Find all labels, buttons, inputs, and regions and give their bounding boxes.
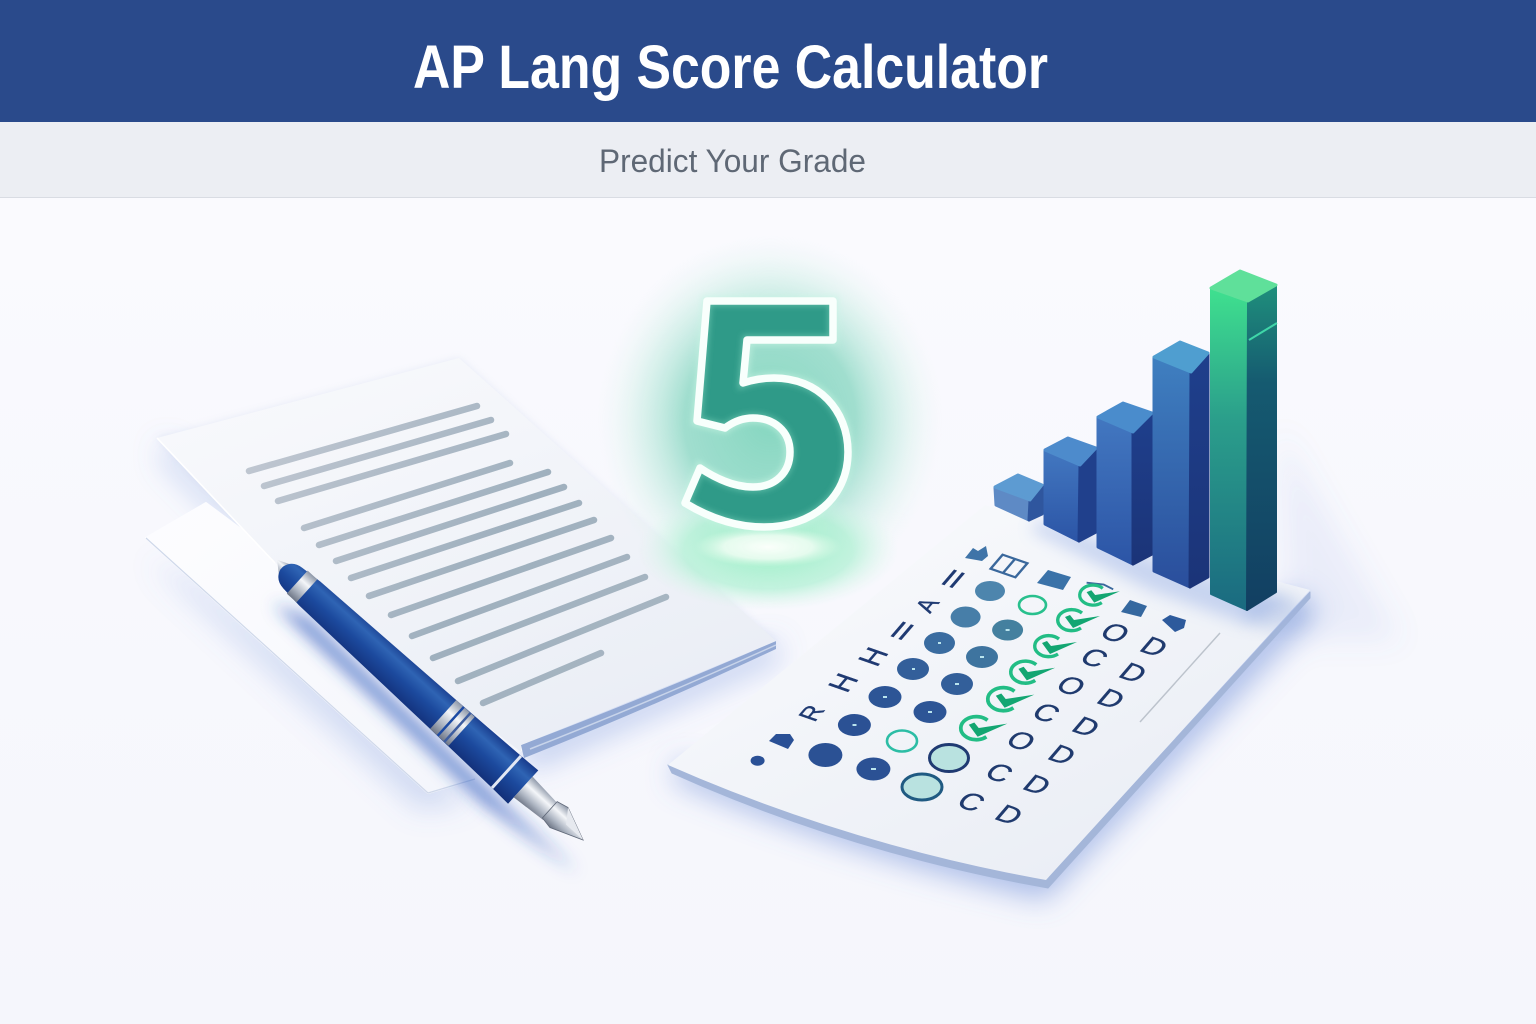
text lines [249, 406, 666, 703]
answer letters C and D: C [978, 758, 1019, 789]
left column labels: II [884, 617, 919, 646]
page white rim [157, 438, 275, 563]
answer sheet with chart [668, 271, 1400, 900]
green check marks [961, 583, 1120, 740]
answer letters C and D: D [1112, 658, 1153, 689]
sheet surface [668, 505, 1310, 880]
answer letters C and D: C [1073, 643, 1114, 674]
sheet edge [668, 592, 1310, 888]
subtitle band [0, 122, 1536, 198]
bar 3 [1098, 403, 1152, 564]
answer letters C and D: D [1041, 740, 1082, 771]
bottom green halo [638, 490, 898, 610]
answer letters C and D: D [1016, 770, 1057, 801]
glowing score 5 [617, 256, 922, 604]
numeral outline [685, 301, 848, 527]
sheet shadow [672, 430, 1400, 900]
answer letters C and D: O [1094, 618, 1136, 649]
answer letters C and D: C [950, 787, 991, 818]
pen tip end [269, 555, 291, 578]
bar 1 [995, 475, 1042, 520]
document soft outline [157, 358, 776, 745]
top page [157, 358, 776, 752]
left column labels [793, 565, 970, 725]
pen band upper [287, 571, 317, 602]
answer letters C and D: D [1133, 632, 1174, 663]
document with lines [146, 358, 780, 810]
numeral glow [685, 301, 848, 527]
answer letters C and D [950, 618, 1174, 831]
pen [260, 545, 598, 873]
answer letters C and D: O [1000, 726, 1042, 757]
bar chart [995, 271, 1290, 625]
left column labels: A [909, 594, 946, 616]
pen collar ring [491, 755, 522, 789]
left column labels: R [793, 702, 832, 725]
under sheet edge [146, 538, 475, 793]
top row marks [965, 546, 1186, 632]
left column labels: H [852, 644, 896, 670]
numeral inner light [685, 301, 848, 527]
answer letters C and D: D [988, 800, 1029, 831]
filled answer bubbles [808, 581, 1023, 780]
pen body [267, 551, 538, 804]
bar 4 [1154, 342, 1208, 587]
bar chart floor shadow [1030, 520, 1290, 625]
document shadow [150, 440, 780, 810]
answer letters C and D: D [1065, 712, 1106, 743]
outer glow [598, 235, 942, 605]
open green bubbles [887, 596, 1046, 752]
answer letters C and D: D [1090, 684, 1131, 715]
left column labels: II [935, 565, 970, 594]
highlighted bubbles [902, 744, 968, 800]
bar 5 green [1211, 271, 1277, 610]
subtitle: Predict Your Grade [599, 143, 866, 179]
floor light [694, 527, 842, 567]
answer letters C and D: C [1025, 698, 1066, 729]
left column square and dot [751, 734, 794, 766]
pen shadow [273, 603, 578, 873]
numeral fill [685, 301, 848, 527]
pen nib [541, 799, 593, 850]
sheet rule line [1140, 633, 1220, 722]
bar 2 [1045, 438, 1096, 541]
sheet surface shade [1245, 594, 1305, 630]
page stack highlight [530, 645, 776, 749]
pen band lower [430, 700, 475, 746]
pen grip [514, 777, 560, 822]
title: AP Lang Score Calculator [413, 33, 1048, 101]
bar 5 highlight [1249, 323, 1277, 340]
under sheet [146, 503, 530, 793]
header banner [0, 0, 1536, 122]
answer letters C and D: O [1050, 671, 1092, 702]
left column labels: H [822, 670, 866, 696]
page stack edge [521, 641, 776, 758]
